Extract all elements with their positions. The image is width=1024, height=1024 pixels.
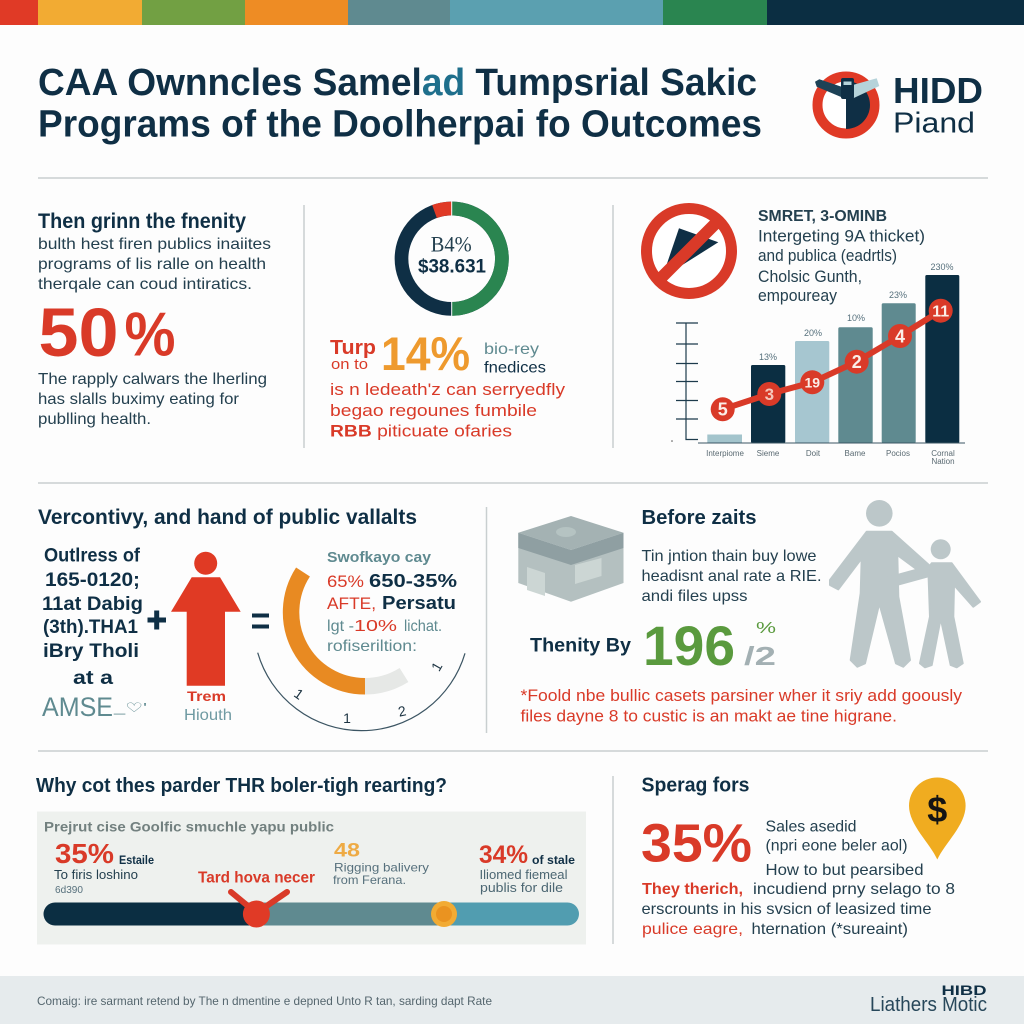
donut chart: B4% <box>431 232 472 257</box>
panel: 35% sales: pulice eagre, <box>642 921 743 938</box>
stat: 35%: 6d390 <box>55 885 83 896</box>
bar chart: 10% <box>847 313 865 323</box>
trend line with numbered markers: 11 <box>932 304 949 320</box>
panel: donut stat: on to <box>331 356 368 373</box>
stat: 35%: 35% <box>55 838 114 869</box>
icon: equals <box>252 616 269 626</box>
logo: HIDD <box>893 70 983 111</box>
text block: gauge stats: rofiseriltion: <box>327 638 417 655</box>
title: Programs of the Doolherpai fo Outcomes <box>38 104 762 146</box>
gauge: 2 <box>396 702 408 720</box>
panel: 35% sales: They therich, <box>642 881 743 898</box>
bar chart: Interpiome <box>706 449 744 458</box>
panel: progress section <box>36 775 586 944</box>
bar chart: 23% <box>889 290 907 300</box>
panel: 35% sales: 35% <box>641 814 752 874</box>
progress bar <box>44 892 579 928</box>
stat: 34%: publis for dile <box>480 880 563 895</box>
stat: 34%: of stale <box>532 853 575 867</box>
stat: 48: 48 <box>334 840 360 862</box>
title: CAA Ownncles Samelad Tumpsrial Sakic <box>38 62 757 104</box>
bar chart: 230% <box>930 262 954 272</box>
panel: 35% sales: incudiend prny selago to 8 <box>753 881 955 898</box>
text block: centred list: 11at Dabig <box>42 594 143 615</box>
panel: equation section: Vercontivy, and hand of public vallalts <box>38 506 417 529</box>
text block: centred list <box>42 546 143 689</box>
stat: 34%: 34% <box>479 841 528 869</box>
panel: before traits: Thenity By <box>530 636 631 656</box>
panel: bar chart and prohibition sign: SMRET, 3-OMINB <box>758 208 887 225</box>
icon: plus <box>148 610 166 630</box>
panel: bar chart and prohibition sign: empoureay <box>758 286 837 305</box>
panel: 35% sales: Sales asedid <box>766 818 856 836</box>
text block: gauge stats: Persatu <box>382 593 456 613</box>
gauge: 1 <box>291 685 307 703</box>
stat: 34% <box>479 841 575 895</box>
icon: dollar pin <box>909 777 966 860</box>
panel: before traits: headisnt anal rate a RIE. <box>642 568 822 585</box>
stat: 48 <box>333 840 429 887</box>
bar chart: 13% <box>759 352 777 362</box>
panel: donut stat: bio-rey <box>484 341 539 358</box>
panel: before traits: andi files upss <box>642 588 748 605</box>
bar chart: Doit <box>806 449 821 458</box>
panel: progress section: Prejrut cise Goolfic smuchle yapu public <box>44 818 334 834</box>
footer logo: HIBD <box>942 982 986 998</box>
logo <box>815 70 983 140</box>
bar chart: Bame <box>845 449 866 458</box>
footer logo <box>870 982 987 1016</box>
text block: centred list: at a <box>73 668 114 689</box>
panel: donut stat: 14% <box>381 327 470 380</box>
text block: gauge stats: lichat. <box>404 618 442 635</box>
gauge: 1 <box>428 659 446 674</box>
panel: before traits: Tin jntion thain buy lowe <box>642 548 817 565</box>
bar chart <box>671 262 965 466</box>
text block: gauge stats: 10% <box>354 618 397 635</box>
text block: gauge stats: lgt - <box>327 618 354 635</box>
panel: bar chart and prohibition sign: Cholsic Gunth, <box>758 267 862 286</box>
panel: headline stat 50% <box>38 210 271 428</box>
panel: bar chart and prohibition sign: and publica (eadrtls) <box>758 246 897 265</box>
stat: 48: from Ferana. <box>333 873 406 887</box>
panel: 35% sales <box>641 774 966 938</box>
bar chart: Sieme <box>757 449 780 458</box>
bar chart: 20% <box>804 328 822 338</box>
panel: headline stat 50%: 50 <box>38 294 118 371</box>
text block: gauge stats: AFTE, <box>327 594 376 613</box>
trend line with numbered markers: 2 <box>852 352 862 372</box>
panel: before traits: *Foold nbe bullic casets parsiner wher it sriy add goously <box>520 686 963 705</box>
icon: prohibition sign <box>646 208 732 294</box>
panel: progress section: Why cot thes parder THR boler-tigh rearting? <box>36 775 447 797</box>
title <box>38 62 762 146</box>
text block: gauge stats: 650-35% <box>369 571 457 591</box>
text block: centred list: iBry Tholi <box>43 641 139 662</box>
footer logo: Liathers Motic <box>870 994 987 1016</box>
icon: dollar pin: $ <box>927 789 947 830</box>
text block: centred list: (3th).THA1 <box>43 617 138 638</box>
panel: headline stat 50%: The rapply calwars the lherling <box>38 371 267 388</box>
trend line with numbered markers: 3 <box>765 385 774 404</box>
panel: before traits: Before zaits <box>642 507 756 529</box>
panel: donut stat: fnedices <box>484 360 546 376</box>
logo: Piand <box>893 108 975 140</box>
icon: box <box>518 516 624 602</box>
panel: donut stat: Turp <box>330 337 376 359</box>
panel: 35% sales: Sperag fors <box>642 774 750 796</box>
text block: gauge stats: 65% <box>327 572 364 591</box>
donut chart <box>402 202 502 316</box>
icon: person arrow: Trem <box>187 688 226 704</box>
panel: 35% sales: How to but pearsibed <box>766 862 924 879</box>
trend line with numbered markers <box>711 299 953 421</box>
panel: donut stat: is n ledeath'z can serryedfly <box>330 380 566 399</box>
stat: 35%: Estaile <box>119 853 154 867</box>
stat: 35%: To firis loshino <box>54 867 138 882</box>
gauge: 1 <box>343 710 351 726</box>
donut chart: $38.631 <box>418 257 486 278</box>
panel: before traits: files dayne 8 to custic is an makt ae tine higrane. <box>520 706 897 726</box>
text block: centred list: Outlress of <box>44 546 141 566</box>
stat: 48: Rigging balivery <box>334 860 429 874</box>
panel: headline stat 50%: % <box>124 300 176 370</box>
stat: 35% <box>54 838 154 896</box>
icon: person arrow <box>171 552 241 724</box>
trend line with numbered markers: 5 <box>718 400 728 420</box>
panel: before traits <box>518 500 980 726</box>
panel: headline stat 50%: programs of lis ralle on health <box>38 256 266 273</box>
panel: equation section <box>38 506 465 731</box>
panel: before traits: 196 <box>643 614 735 677</box>
panel: donut stat: begao regounes fumbile <box>330 401 537 420</box>
panel: bar chart and prohibition sign: Intergeting 9A thicket) <box>758 226 925 246</box>
panel: 35% sales: erscrounts in his svsicn of leasized time <box>642 901 932 918</box>
footer band <box>0 976 1024 1024</box>
panel: bar chart and prohibition sign <box>646 208 965 466</box>
panel: equation section: _♡' <box>112 700 147 715</box>
panel: before traits: % <box>756 620 776 637</box>
panel: equation section: AMSE <box>42 692 113 722</box>
panel: 35% sales: (npri eone beler aol) <box>766 838 908 854</box>
text block: centred list: 165-0120; <box>45 570 140 591</box>
top colour band <box>0 0 1024 25</box>
text block: gauge stats <box>327 549 457 655</box>
panel: headline stat 50%: bulth hest firen publics inaiites <box>38 236 271 253</box>
panel: headline stat 50%: has slalls buximy eating for <box>38 391 240 408</box>
bar chart: Pocios <box>886 449 910 458</box>
footer band: Comaig: ire sarmant retend by The n dmentine e depned Unto R tan, sarding dapt Rate <box>37 994 492 1008</box>
panel: headline stat 50%: therqale can coud intiratics. <box>38 276 252 293</box>
trend line with numbered markers: 4 <box>895 326 905 346</box>
panel: donut stat: RBB piticuate ofaries <box>330 422 512 440</box>
icon: person arrow: Hiouth <box>184 707 232 724</box>
panel: headline stat 50%: publling health. <box>38 411 151 428</box>
panel: before traits: /2 <box>744 641 776 671</box>
text block: gauge stats: Swofkayo cay <box>327 549 432 566</box>
stat: 34%: Iliomed fiemeal <box>480 867 568 882</box>
panel: headline stat 50%: Then grinn the fnenity <box>38 210 246 233</box>
trend line with numbered markers: 19 <box>805 374 820 390</box>
bar chart: Cornal <box>931 449 955 458</box>
gauge <box>258 572 465 731</box>
bar chart: Nation <box>931 457 955 466</box>
panel: progress section: Tard hova necer <box>198 870 315 886</box>
panel: 35% sales: hternation (*sureaint) <box>752 921 908 938</box>
panel: donut stat <box>330 202 566 440</box>
icon: adult and child figures <box>830 500 980 667</box>
